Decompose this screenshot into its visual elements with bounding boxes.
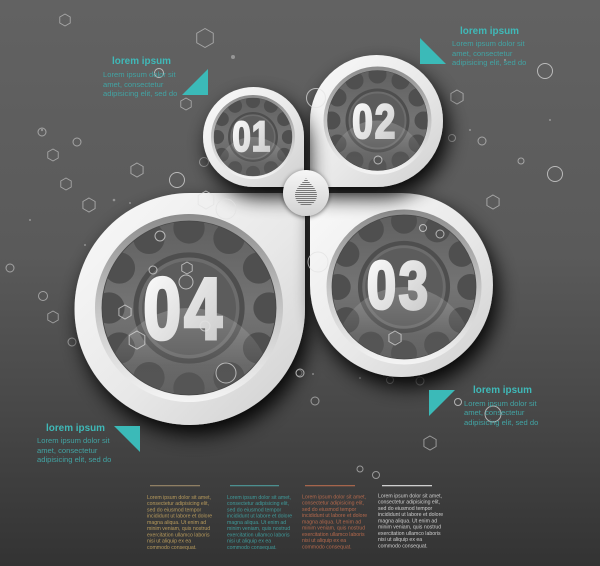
text column 4: commodo consequat. [378,544,428,550]
callout: top right [420,25,526,67]
icon: striped drop [295,178,317,205]
text column 4: incididunt ut labore et dolore [378,512,443,518]
text column 1: Lorem ipsum dolor sit amet, [147,495,211,501]
center badge with drop icon [283,170,329,216]
text column 3: exercitation ullamco laboris [302,532,365,538]
number 02: 02 [352,96,397,149]
text column 2: minim veniam, quis nostrud [227,526,290,532]
text column 3: minim veniam, quis nostrud [302,526,365,532]
text column 1 [147,485,212,551]
text column 1: nisi ut aliquip ex ea [147,539,191,545]
body text: amet, consectetur [464,408,525,417]
text column 4: Lorem ipsum dolor sit amet, [378,494,442,500]
lens 02 [322,66,432,216]
heading: lorem ipsum [112,55,171,67]
text column 4: sed do eiusmod tempor [378,506,432,512]
text column 4: consectetur adipisicing elit, [378,500,440,506]
text column 2: commodo consequat. [227,545,277,551]
body text: adipisicing elit, sed do [103,89,177,98]
text column 2: consectetur adipisicing elit, [227,501,289,507]
panel: step 03 [310,193,493,424]
icon: triangle [429,390,455,416]
heading: lorem ipsum [460,25,519,37]
text column 2: exercitation ullamco laboris [227,532,290,538]
body text: amet, consectetur [103,80,164,89]
text column 1: exercitation ullamco laboris [147,532,210,538]
body text: Lorem ipsum dolor sit [103,70,176,79]
callout: bottom left [37,422,140,464]
text column 2: incididunt ut labore et dolore [227,514,292,520]
heading: lorem ipsum [46,422,105,434]
number 03: 03 [367,247,431,323]
panel shape 01 [203,87,304,187]
panel shape 04 [74,193,305,425]
panel shape 02 [310,55,443,187]
text column 2: sed do eiusmod tempor [227,508,281,514]
panel: step 02 [310,55,443,216]
text column 2 [227,485,292,551]
text column 1: minim veniam, quis nostrud [147,526,210,532]
text column 4 [378,485,443,550]
text column 4: exercitation ullamco laboris [378,531,441,537]
body text: adipisicing elit, sed do [464,418,538,427]
text column 1: magna aliqua. Ut enim ad [147,520,206,526]
heading: lorem ipsum [473,384,532,396]
panel: step 04 [74,193,305,473]
text column 1: incididunt ut labore et dolore [147,514,212,520]
panel shape 03 [310,193,493,377]
number 04: 04 [143,259,225,357]
body text: adipisicing elit, sed do [37,455,111,464]
text column 3: Lorem ipsum dolor sit amet, [302,494,366,500]
text column 4: magna aliqua. Ut enim ad [378,518,437,524]
text column 3: magna aliqua. Ut enim ad [302,520,361,526]
floating bubbles behind [6,14,551,478]
text column 3: incididunt ut labore et dolore [302,513,367,519]
panel: step 01 [203,87,304,211]
lens 04 [93,212,285,473]
text column 2: nisi ut aliquip ex ea [227,539,271,545]
text column 1: commodo consequat. [147,545,197,551]
callout: top left [103,55,208,98]
text column 4: nisi ut aliquip ex ea [378,537,422,543]
text column 1: consectetur adipisicing elit, [147,501,209,507]
bubbles in front [119,64,562,422]
body text: adipisicing elit, sed do [452,58,526,67]
text column 3 [302,485,367,550]
icon: triangle [114,426,140,452]
body text: amet, consectetur [37,446,98,455]
lens 01 [210,94,296,211]
body text: Lorem ipsum dolor sit [37,436,110,445]
icon: triangle [420,38,446,64]
body text: Lorem ipsum dolor sit [464,399,537,408]
text column 3: sed do eiusmod tempor [302,507,356,513]
text column 3: commodo consequat. [302,544,352,550]
text column 2: Lorem ipsum dolor sit amet, [227,495,291,501]
icon: triangle [182,69,208,95]
body text: amet, consectetur [452,49,513,58]
text column 3: consectetur adipisicing elit, [302,501,364,507]
lens 03 [325,208,483,424]
text column 1: sed do eiusmod tempor [147,508,201,514]
body text: Lorem ipsum dolor sit [452,39,525,48]
text column 3: nisi ut aliquip ex ea [302,538,346,544]
text column 4: minim veniam, quis nostrud [378,525,441,531]
number 01: 01 [232,113,271,161]
callout: bottom right [429,384,538,427]
text column 2: magna aliqua. Ut enim ad [227,520,286,526]
